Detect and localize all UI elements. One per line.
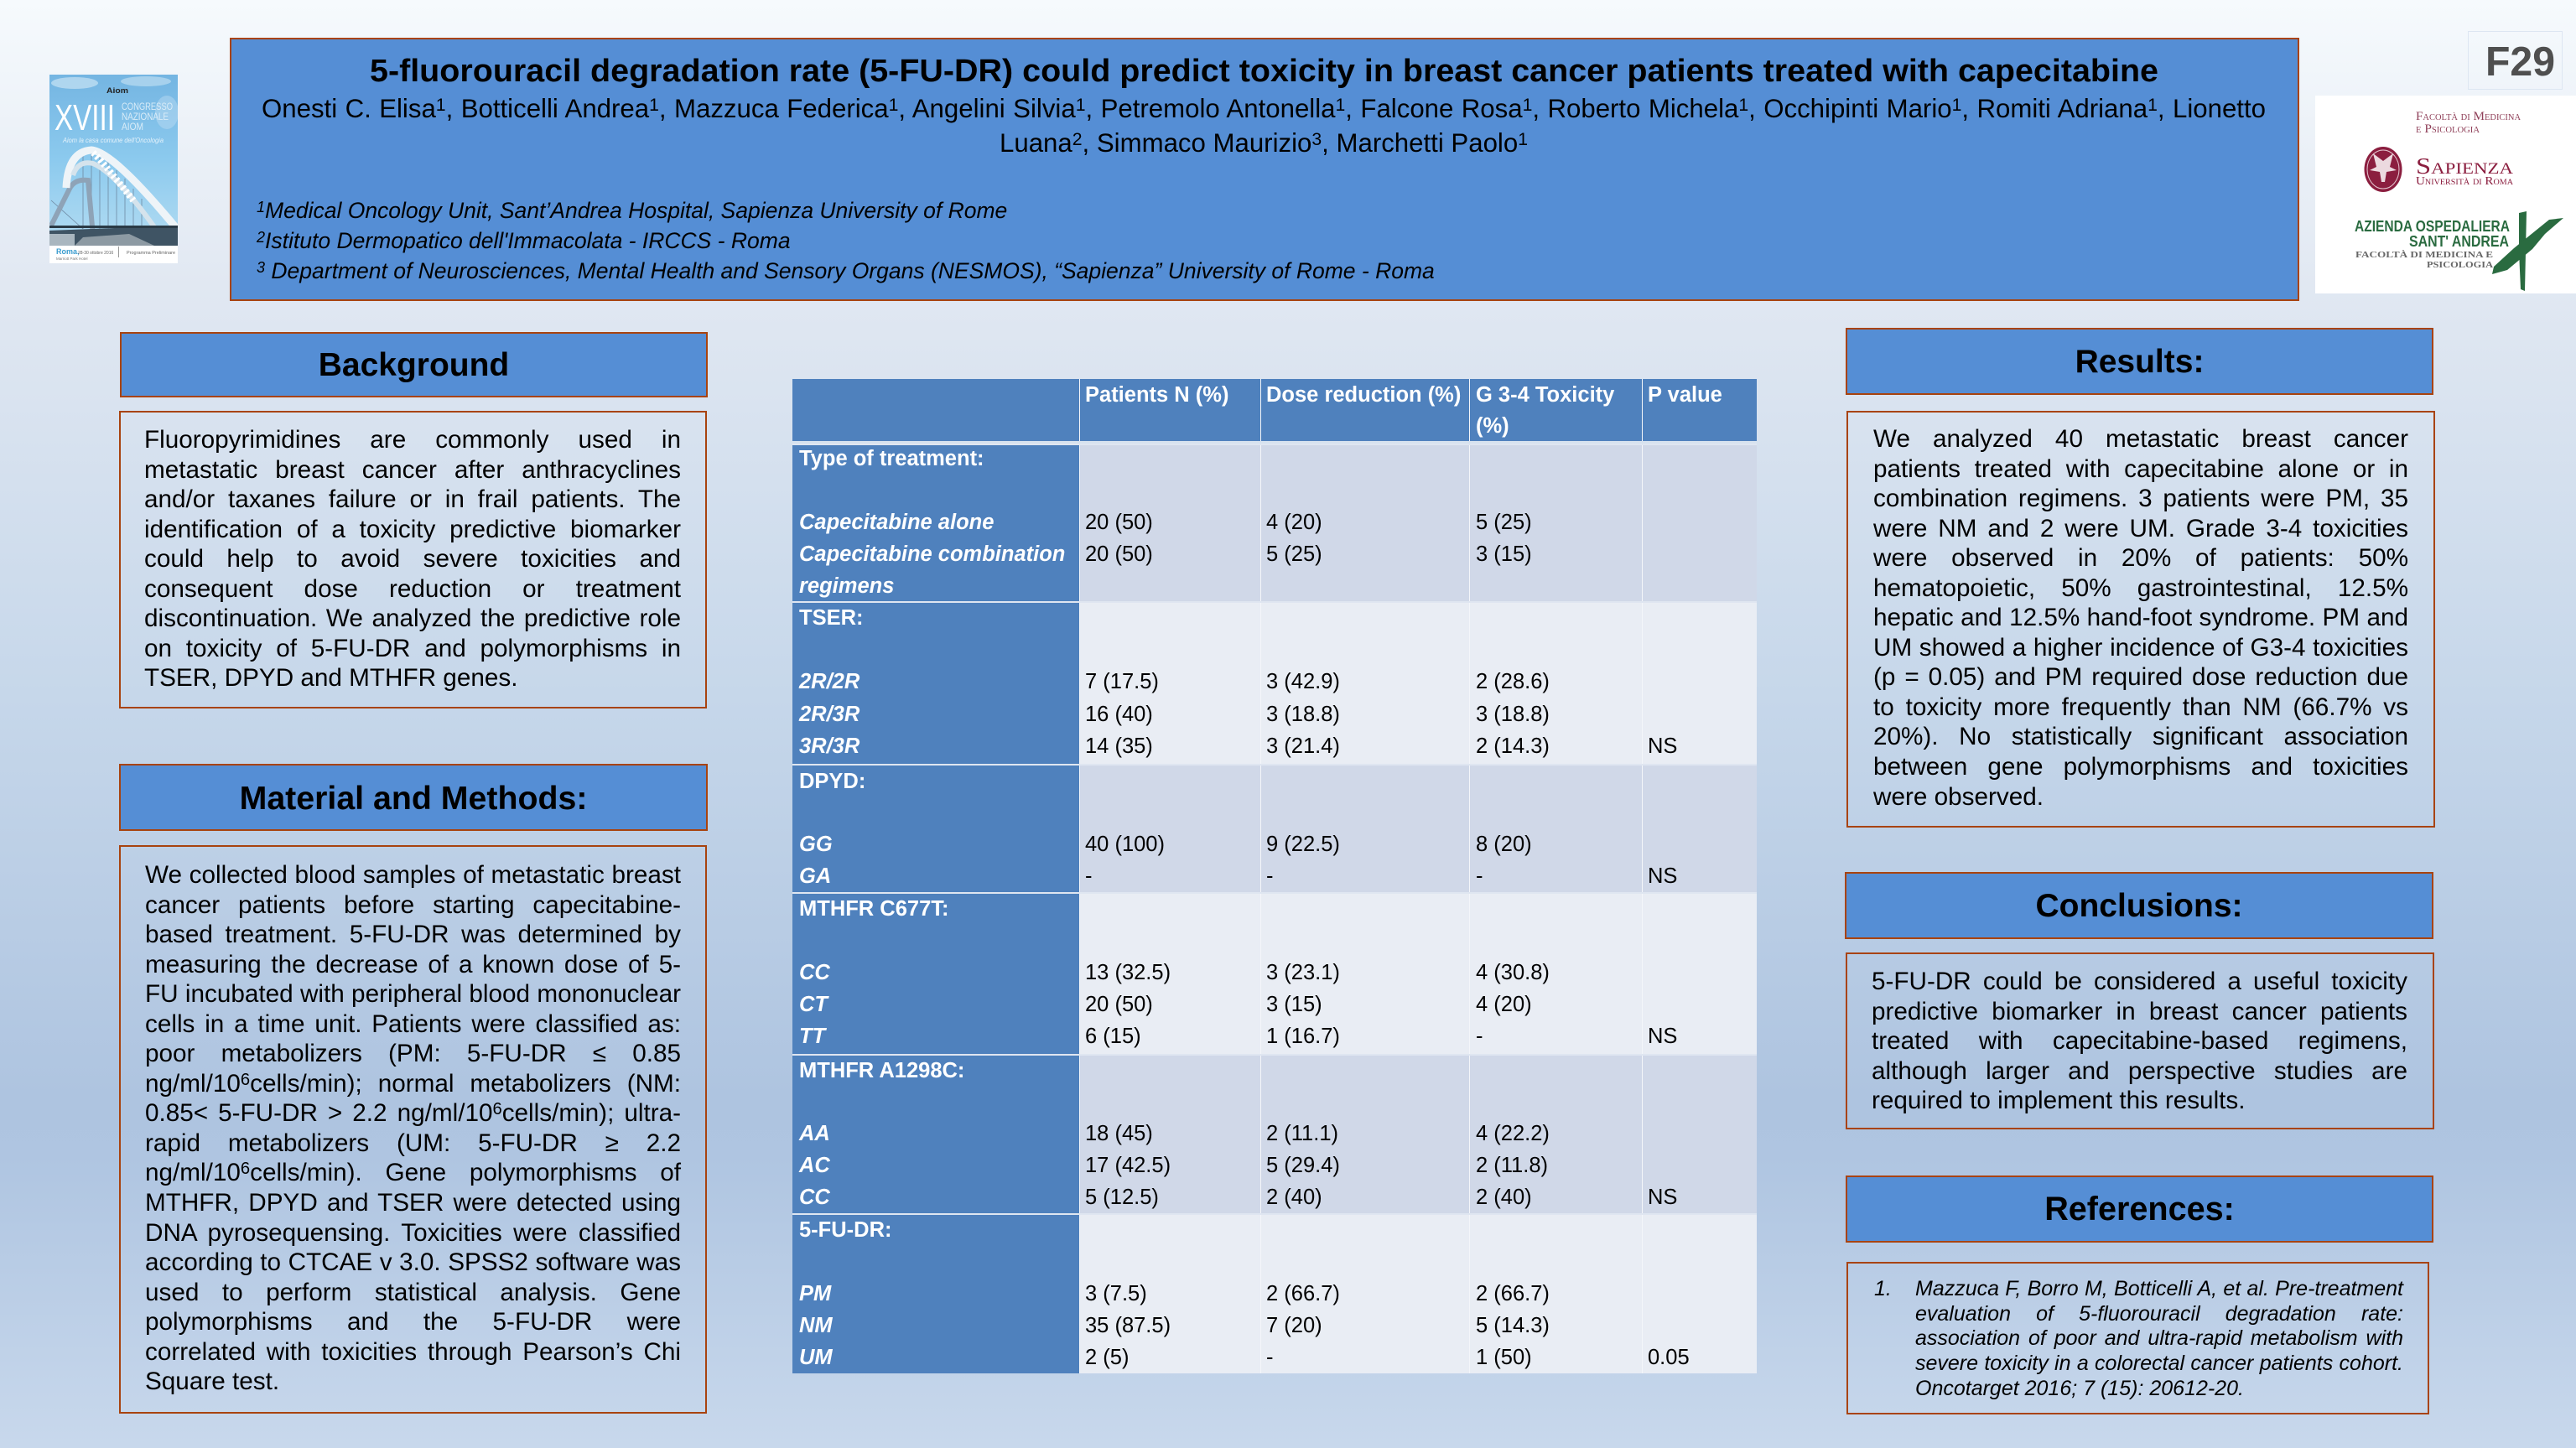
table group: MTHFR A1298C: 2 (40) [1476,1186,1532,1209]
text: affiliations: 1Medical Oncology Unit, Sant’Andrea Hospital, Sapienza University of Rome [257,198,1007,223]
text: background paragraph: metastatic breast cancer after anthracyclines [144,456,681,484]
table group: MTHFR C677T: 13 (32.5) [1085,961,1171,984]
image: congress programme cover: Marriott Park Hotel [56,257,88,261]
icon: Sapienza crest [2365,147,2402,192]
text: results paragraph: hematopoietic, 50% gastrointestinal, 12.5% [1873,574,2408,602]
table group: DPYD: GG [799,833,833,856]
table group: TSER: 2 (28.6) [1476,670,1550,693]
text: background paragraph: TSER, DPYD and MTHFR genes. [144,664,517,692]
table group: MTHFR C677T: CT [799,993,828,1016]
table group: TSER: NS [1648,734,1677,758]
table group: MTHFR A1298C: CC [799,1186,830,1209]
table group: 5-FU-DR: UM [799,1346,833,1369]
table group: 5-FU-DR: 5 (14.3) [1476,1314,1550,1337]
table group: 5-FU-DR: 2 (5) [1085,1346,1129,1369]
table group: type of treatment: Capecitabine alone [799,511,994,534]
table header row [792,379,1757,441]
table group: type of treatment: regimens [799,574,894,598]
text: conclusions paragraph: predictive biomarker in breast cancer patients [1872,998,2407,1025]
table group: 5-FU-DR: 3 (7.5) [1085,1282,1147,1305]
text: authors: Luana2, Simmaco Maurizio3, Marchetti Paolo1 [1000,128,1528,158]
text: methods paragraph: poor metabolizers (PM: 5-FU-DR ≤ 0.85 [145,1040,681,1067]
panel: Material and Methods text [119,845,707,1414]
table group: type of treatment: 4 (20) [1266,511,1322,534]
panel: Background text [119,411,707,708]
text: affiliations: 3 Department of Neurosciences, Mental Health and Sensory Organs (NESMOS), “Sapienza” University of Rome - Roma [257,258,1435,283]
table group: MTHFR A1298C [792,1054,1757,1213]
text: faculty of medicine: Facoltà di Medicina [2416,110,2521,123]
table group: TSER: 3 (21.4) [1266,734,1340,758]
heading: Material and Methods [119,764,708,831]
table group: 5-FU-DR: 5-FU-DR: [799,1218,891,1242]
text: faculty line: FACOLTÀ DI MEDICINA E [2355,250,2493,260]
table group: DPYD: - [1476,864,1483,888]
text: methods paragraph: DNA pyrosequensing. Toxicities were classified [145,1219,681,1247]
text: reference 1: association of poor and ultra-rapid metabolism with [1915,1326,2403,1350]
table group: MTHFR A1298C: 18 (45) [1085,1122,1153,1145]
table group: 5-FU-DR [792,1213,1757,1373]
image: congress programme cover: Roma, [56,247,80,256]
text: methods paragraph: rapid metabolizers (UM: 5-FU-DR ≥ 2.2 [145,1129,681,1157]
text: methods paragraph: correlated with toxicities through Pearson’s Chi [145,1338,681,1366]
table group: DPYD: DPYD: [799,770,865,793]
text: reference 1: evaluation of 5-fluorouracil degradation rate: [1915,1302,2403,1326]
text: methods paragraph: 0.85< 5-FU-DR > 2.2 ng/ml/106cells/min); ultra- [145,1099,681,1127]
text: background paragraph: on toxicity of 5-FU-DR and polymorphisms in [144,635,681,662]
table group: MTHFR C677T: 6 (15) [1085,1025,1141,1048]
text: background paragraph: consequent dose reduction or treatment [144,575,681,603]
panel: Results text [1846,411,2435,828]
text: Sapienza wordmark: Università di Roma [2416,174,2514,187]
table header row: (%) [1476,414,1509,438]
heading: Results: Results: [2075,344,2204,380]
text: results paragraph: to toxicity more frequently than NM (66.7% vs [1873,693,2408,721]
text: faculty line: PSICOLOGIA [2427,260,2493,270]
text: conclusions paragraph: although larger and perspective studies are [1872,1057,2407,1085]
table group: type of treatment [792,444,1757,601]
text: Azienda Ospedaliera Sant'Andrea [2355,218,2510,250]
text: background paragraph: identification of a toxicity predictive biomarker [144,516,681,543]
table group: 5-FU-DR: 2 (66.7) [1266,1282,1340,1305]
text: faculty line [2355,250,2493,270]
icon: green brush X [2492,211,2563,291]
text: results paragraph: We analyzed 40 metastatic breast cancer [1873,425,2408,453]
text: background paragraph: could help to avoid severe toxicities and [144,545,681,573]
text: methods paragraph: cells in a time unit. Patients were classified as: [145,1010,681,1038]
heading: References: References: [2044,1191,2235,1227]
heading: Results [1846,328,2433,395]
text: authors: Onesti C. Elisa1, Botticelli Andrea1, Mazzuca Federica1, Angelini Silvia1, Petremolo Antonella1, Falcone Rosa1, Roberto Michela1, Occhipinti Mario1, Romiti Adriana1, Lionetto [262,94,2266,123]
text: results paragraph: patients treated with capecitabine alone or in [1873,455,2408,483]
table group: 5-FU-DR: NM [799,1314,833,1337]
table group: TSER: 2R/3R [799,703,860,726]
table group: type of treatment: 5 (25) [1476,511,1532,534]
table header row: P value [1648,383,1722,407]
heading: Conclusions [1845,872,2433,939]
text: methods paragraph: based treatment. 5-FU-DR was determined by [145,921,681,948]
image: congress programme cover: Aiom la casa comune dell'Oncologia [62,136,164,144]
table group: TSER [792,601,1757,764]
text: Sapienza wordmark: Sapienza [2416,153,2513,179]
text: faculty of medicine [2416,110,2521,136]
label: poster code F29: F29 [2485,39,2555,85]
text: results paragraph: were NM and 2 were UM. Grade 3-4 toxicities [1873,515,2408,542]
text: methods paragraph: polymorphisms and the 5-FU-DR were [145,1308,681,1336]
heading: Material and Methods: Material and Methods: [240,780,587,817]
text: results paragraph: were observed in 20% of patients: 50% [1873,544,2408,572]
table group: type of treatment: 3 (15) [1476,542,1532,566]
table group: MTHFR C677T: 3 (15) [1266,993,1322,1016]
table group: DPYD: NS [1648,864,1677,888]
text: methods paragraph: ng/ml/106cells/min). Gene polymorphisms of [145,1159,681,1186]
table group: MTHFR C677T: - [1476,1025,1483,1048]
table group: TSER: 2R/2R [799,670,860,693]
text: results paragraph: UM showed a higher incidence of G3-4 toxicities [1873,634,2408,662]
text: results paragraph [1873,425,2408,811]
text: Sapienza wordmark [2416,153,2514,187]
text: reference 1 [1874,1277,2404,1400]
panel: Conclusions text [1846,952,2434,1129]
table group: MTHFR A1298C: 5 (12.5) [1085,1186,1159,1209]
image: congress programme cover: Programma Preliminare [127,251,175,256]
heading: Conclusions: Conclusions: [2035,888,2242,924]
table group: TSER: 3R/3R [799,734,860,758]
table group: DPYD: 8 (20) [1476,833,1532,856]
text: Azienda Ospedaliera Sant'Andrea: SANT' ANDREA [2409,233,2509,250]
table group: 5-FU-DR: 35 (87.5) [1085,1314,1171,1337]
table group: MTHFR C677T: 3 (23.1) [1266,961,1340,984]
table group: TSER: 2 (14.3) [1476,734,1550,758]
table group: DPYD: - [1266,864,1273,888]
text: methods paragraph: MTHFR, DPYD and TSER were detected using [145,1189,681,1217]
panel: References [1846,1262,2429,1414]
table group: MTHFR C677T: 4 (20) [1476,993,1532,1016]
image: congress programme cover: NAZIONALE [122,111,169,122]
table group: MTHFR A1298C: 2 (40) [1266,1186,1322,1209]
text: reference 1: Oncotarget 2016; 7 (15): 20612-20. [1915,1377,2244,1400]
text: reference 1: 1. [1874,1277,1892,1300]
table group: type of treatment: Capecitabine combination [799,542,1065,566]
text: faculty of medicine: e Psicologia [2416,122,2480,136]
table group: MTHFR A1298C: AC [799,1154,830,1177]
text: methods paragraph: cancer patients before starting capecitabine- [145,891,681,919]
table group: MTHFR C677T: 4 (30.8) [1476,961,1550,984]
text: affiliations [257,198,1435,283]
text: reference 1: severe toxicity in a colorectal cancer patients cohort. [1915,1352,2403,1375]
table header row: Patients N (%) [1085,383,1228,407]
image: congress programme cover [49,75,178,263]
text: Azienda Ospedaliera Sant'Andrea: AZIENDA OSPEDALIERA [2355,218,2510,235]
table group: type of treatment: 20 (50) [1085,511,1153,534]
table group: 5-FU-DR: 0.05 [1648,1346,1690,1369]
text: conclusions paragraph: 5-FU-DR could be considered a useful toxicity [1872,968,2407,995]
table group: MTHFR C677T: 1 (16.7) [1266,1025,1340,1048]
heading: poster title: 5-fluorouracil degradation rate (5-FU-DR) could predict toxicity in breast cancer patients treated with capecitabine [370,54,2158,89]
table group: TSER: 16 (40) [1085,703,1153,726]
table group: MTHFR A1298C: 2 (11.8) [1476,1154,1548,1177]
table group: MTHFR C677T: 20 (50) [1085,993,1153,1016]
text: results paragraph: between gene polymorphisms and toxicities [1873,753,2408,781]
table group: TSER: 7 (17.5) [1085,670,1159,693]
text: results paragraph: hepatic and 12.5% hand-foot syndrome. PM and [1873,604,2408,631]
table group: MTHFR A1298C: 4 (22.2) [1476,1122,1550,1145]
text: methods paragraph [145,861,681,1395]
table group: TSER: 14 (35) [1085,734,1153,758]
table group: TSER: 3 (42.9) [1266,670,1340,693]
table group: type of treatment: 5 (25) [1266,542,1322,566]
text: authors [262,94,2266,158]
text: background paragraph: discontinuation. We analyzed the predictive role [144,605,681,632]
table group: MTHFR A1298C: NS [1648,1186,1677,1209]
table group: 5-FU-DR: - [1266,1346,1273,1369]
image: congress programme cover: XVIII [55,97,115,138]
text: background paragraph: Fluoropyrimidines are commonly used in [144,426,681,454]
text: methods paragraph: We collected blood samples of metastatic breast [145,861,681,889]
image: congress programme cover: Aiom [106,86,128,95]
heading: Background: Background [319,347,509,383]
logos: Sapienza and Azienda Ospedaliera Sant'Andrea [2315,96,2576,293]
table group: MTHFR A1298C: AA [799,1122,830,1145]
table header row: G 3-4 Toxicity [1476,383,1614,407]
table group: DPYD: 40 (100) [1085,833,1165,856]
heading: References [1846,1176,2433,1243]
text: conclusions paragraph [1872,968,2407,1114]
table group: 5-FU-DR: PM [799,1282,831,1305]
table group: type of treatment: 20 (50) [1085,542,1153,566]
table group: TSER: 3 (18.8) [1266,703,1340,726]
text: background paragraph: and/or taxanes failure or in frail patients. The [144,485,681,513]
table header row: Dose reduction (%) [1266,383,1461,407]
table group: MTHFR C677T: NS [1648,1025,1677,1048]
table group: DPYD [792,764,1757,892]
panel: title block [230,38,2299,301]
text: conclusions paragraph: required to implement this results. [1872,1087,2246,1114]
table group: MTHFR A1298C: 2 (11.1) [1266,1122,1338,1145]
text: results paragraph: combination regimens. 3 patients were PM, 35 [1873,485,2408,512]
table group: DPYD: GA [799,864,831,888]
text: results paragraph: were observed. [1873,783,2044,811]
text: methods paragraph: according to CTCAE v 3.0. SPSS2 software was [145,1248,681,1276]
table group: MTHFR C677T: MTHFR C677T: [799,897,949,921]
table group: 5-FU-DR: 2 (66.7) [1476,1282,1550,1305]
text: affiliations: 2Istituto Dermopatico dell'Immacolata - IRCCS - Roma [257,228,791,253]
text: results paragraph: (p = 0.05) and PM required dose reduction due [1873,663,2408,691]
table group: MTHFR C677T: TT [799,1025,825,1048]
table group: MTHFR A1298C: MTHFR A1298C: [799,1059,964,1082]
table group: DPYD: - [1085,864,1092,888]
table group: 5-FU-DR: 7 (20) [1266,1314,1322,1337]
image: congress programme cover: AIOM [122,121,143,132]
label: poster code F29 [2468,31,2563,90]
table: patients, dose reduction, toxicity [792,379,1757,1373]
text: background paragraph [144,426,681,692]
text: results paragraph: 20%). No statistically significant association [1873,723,2408,750]
table group: 5-FU-DR: 1 (50) [1476,1346,1532,1369]
table group: MTHFR C677T [792,892,1757,1054]
text: methods paragraph: used to perform statistical analysis. Gene [145,1279,681,1306]
table group: TSER: 3 (18.8) [1476,703,1550,726]
table group: MTHFR A1298C: 5 (29.4) [1266,1154,1340,1177]
table group: DPYD: 9 (22.5) [1266,833,1340,856]
text: methods paragraph: ng/ml/106cells/min); normal metabolizers (NM: [145,1070,681,1098]
text: conclusions paragraph: treated with capecitabine-based regimens, [1872,1027,2407,1055]
table group: TSER: TSER: [799,606,864,630]
table group: MTHFR A1298C: 17 (42.5) [1085,1154,1171,1177]
text: methods paragraph: Square test. [145,1368,279,1395]
image: congress programme cover: 28-30 ottobre 2016 [78,251,113,256]
table group: type of treatment: Type of treatment: [799,447,984,470]
text: methods paragraph: measuring the decrease of a known dose of 5- [145,951,681,978]
text: reference 1: Mazzuca F, Borro M, Botticelli A, et al. Pre-treatment [1915,1277,2403,1300]
text: methods paragraph: FU incubated with peripheral blood mononuclear [145,980,681,1008]
table group: MTHFR C677T: CC [799,961,830,984]
heading: Background [120,332,708,397]
